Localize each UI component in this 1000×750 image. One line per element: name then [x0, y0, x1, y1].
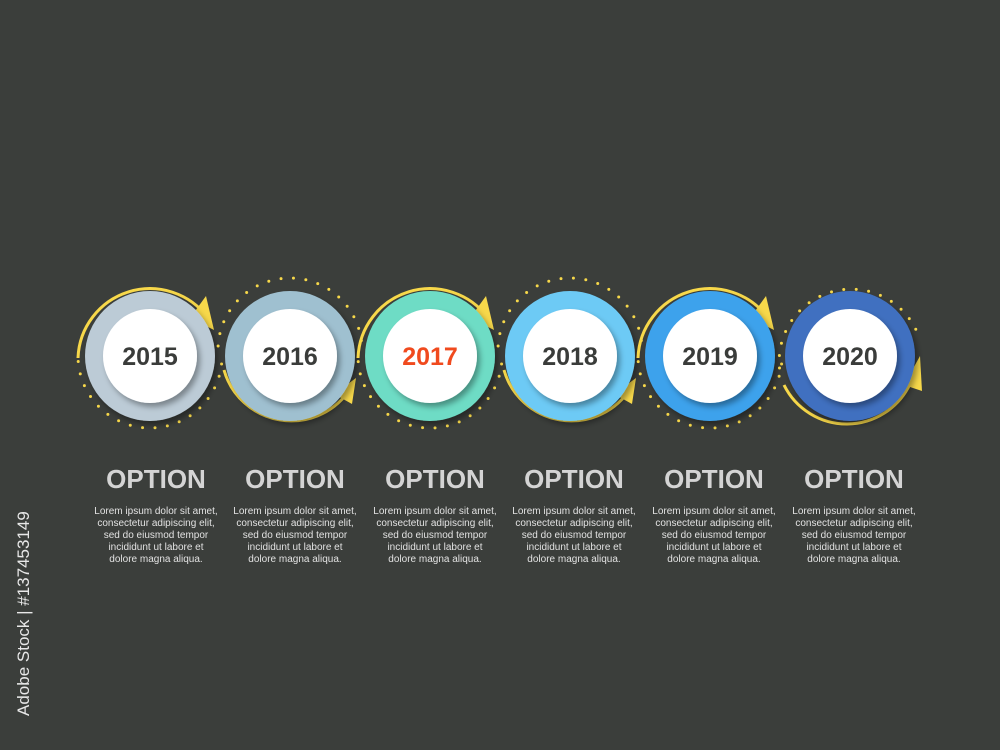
option labels	[106, 464, 904, 494]
descriptions: Lorem ipsum dolor sit amet,	[233, 506, 357, 517]
descriptions: incididunt ut labore et	[387, 542, 483, 553]
descriptions: consectetur adipiscing elit,	[655, 518, 773, 529]
descriptions: dolore magna aliqua.	[248, 554, 342, 565]
step 2018: 2018	[542, 343, 598, 371]
descriptions: consectetur adipiscing elit,	[515, 518, 633, 529]
descriptions: Lorem ipsum dolor sit amet,	[652, 506, 776, 517]
step 2016: 2016	[262, 343, 318, 371]
descriptions	[94, 506, 916, 565]
step 2020: 2020	[822, 343, 878, 371]
descriptions: incididunt ut labore et	[666, 542, 762, 553]
descriptions: Lorem ipsum dolor sit amet,	[94, 506, 218, 517]
descriptions: consectetur adipiscing elit,	[236, 518, 354, 529]
descriptions: dolore magna aliqua.	[388, 554, 482, 565]
descriptions: sed do eiusmod tempor	[104, 530, 209, 541]
descriptions: incididunt ut labore et	[526, 542, 622, 553]
descriptions: dolore magna aliqua.	[667, 554, 761, 565]
descriptions: Lorem ipsum dolor sit amet,	[512, 506, 636, 517]
descriptions: consectetur adipiscing elit,	[795, 518, 913, 529]
option labels: OPTION	[106, 464, 206, 494]
descriptions: incididunt ut labore et	[108, 542, 204, 553]
descriptions: incididunt ut labore et	[247, 542, 343, 553]
descriptions: sed do eiusmod tempor	[802, 530, 907, 541]
descriptions: Lorem ipsum dolor sit amet,	[792, 506, 916, 517]
descriptions: sed do eiusmod tempor	[383, 530, 488, 541]
step 2017: 2017	[402, 343, 458, 371]
step 2019: 2019	[682, 343, 738, 371]
option labels: OPTION	[664, 464, 764, 494]
descriptions: dolore magna aliqua.	[109, 554, 203, 565]
descriptions: consectetur adipiscing elit,	[376, 518, 494, 529]
option labels: OPTION	[524, 464, 624, 494]
descriptions: dolore magna aliqua.	[807, 554, 901, 565]
step 2015	[78, 289, 222, 428]
step 2016	[218, 278, 362, 421]
step 2020	[779, 289, 922, 424]
descriptions: sed do eiusmod tempor	[522, 530, 627, 541]
step 2017	[358, 289, 502, 428]
descriptions: Lorem ipsum dolor sit amet,	[373, 506, 497, 517]
option labels: OPTION	[385, 464, 485, 494]
step 2018	[498, 278, 642, 421]
descriptions: sed do eiusmod tempor	[662, 530, 767, 541]
step 2019	[638, 289, 782, 428]
watermark id: Adobe Stock | #137453149	[14, 511, 33, 716]
descriptions: incididunt ut labore et	[806, 542, 902, 553]
option labels: OPTION	[804, 464, 904, 494]
descriptions: sed do eiusmod tempor	[243, 530, 348, 541]
descriptions: consectetur adipiscing elit,	[97, 518, 215, 529]
descriptions: dolore magna aliqua.	[527, 554, 621, 565]
option labels: OPTION	[245, 464, 345, 494]
step 2015: 2015	[122, 343, 178, 371]
